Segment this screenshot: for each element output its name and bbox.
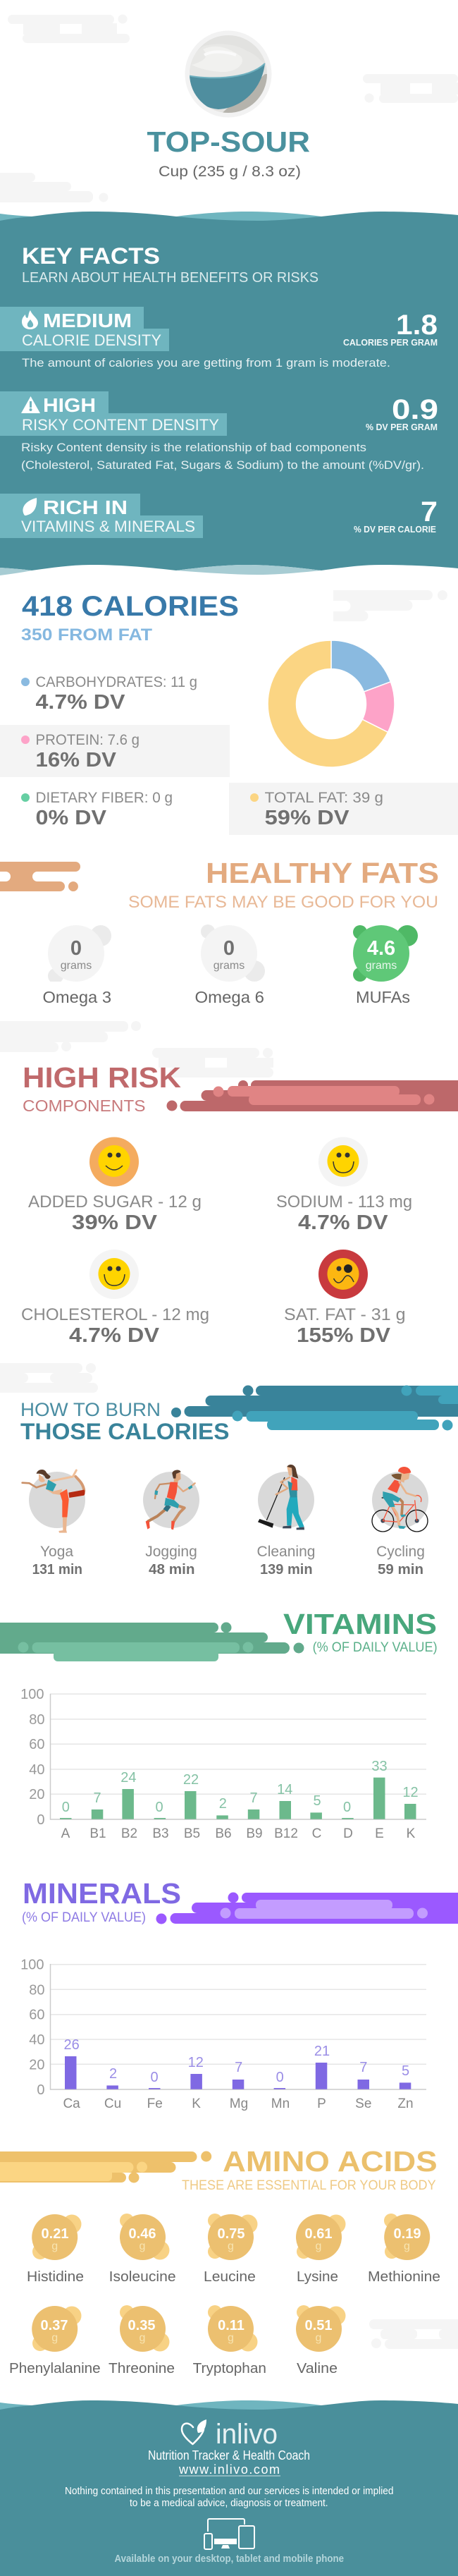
icon: warning triangle	[21, 396, 40, 413]
bar chart: vitamins: 14	[277, 1782, 292, 1797]
mufas: grams	[366, 960, 397, 972]
bar chart: vitamins: E	[375, 1826, 384, 1841]
bar chart: minerals: K	[192, 2096, 201, 2111]
bar chart: minerals: 7	[359, 2060, 367, 2075]
website link: www.inlivo.com	[178, 2462, 280, 2477]
amino: threonine: 0.35	[128, 2318, 155, 2333]
subheading: COMPONENTS	[23, 1097, 146, 1115]
heading: KEY FACTS	[22, 243, 160, 269]
component: saturated fat	[284, 1250, 406, 1347]
fact: risky content density	[0, 391, 438, 472]
panel: how to burn	[20, 1385, 458, 1577]
bar chart: vitamins: 2	[219, 1796, 227, 1812]
macro: dietary fiber	[21, 790, 173, 829]
panel: key facts	[0, 212, 458, 575]
activity: cycling: 59 min	[378, 1562, 423, 1577]
bar chart: vitamins: B2	[121, 1826, 137, 1841]
heading: HIGH RISK	[23, 1061, 181, 1094]
subheading: SOME FATS MAY BE GOOD FOR YOU	[128, 893, 438, 912]
bottom wave light	[0, 565, 321, 575]
bar chart: minerals: 7	[235, 2060, 242, 2075]
background cloud	[333, 590, 447, 621]
fact: risky content density: Risky Content density is the relationship of bad components	[21, 441, 366, 454]
amino: leucine	[204, 2214, 258, 2285]
fact: calorie density: The amount of calories you are getting from 1 gram is moderate.	[22, 356, 390, 370]
macro: dietary fiber: 0% DV	[35, 807, 107, 829]
fact: rich in vitamins and minerals: VITAMINS & MINERALS	[21, 518, 195, 535]
bar chart: minerals: P	[317, 2096, 326, 2111]
component: cholesterol: 4.7% DV	[69, 1324, 160, 1347]
macro: carbohydrates: CARBOHYDRATES: 11 g	[35, 674, 197, 690]
background cloud	[369, 2319, 458, 2349]
amino: phenylalanine	[9, 2306, 101, 2376]
bar chart: vitamins: K	[407, 1826, 416, 1841]
panel: minerals	[20, 1877, 458, 2111]
macro: dietary fiber: DIETARY FIBER: 0 g	[35, 790, 173, 806]
mufas: 4.6	[367, 937, 395, 960]
icon: flame	[22, 310, 38, 329]
subheading: 350 FROM FAT	[21, 625, 152, 645]
component: saturated fat: 155% DV	[297, 1324, 391, 1347]
omega 6: 0	[223, 937, 235, 960]
macro: carbohydrates	[21, 674, 197, 714]
panel: vitamins	[0, 1608, 438, 1841]
macro: protein: PROTEIN: 7.6 g	[35, 732, 140, 748]
top wave light	[0, 212, 321, 226]
mufas: MUFAs	[356, 988, 410, 1006]
bar chart: minerals: 12	[188, 2055, 204, 2070]
fact: risky content density: RISKY CONTENT DENSITY	[22, 416, 219, 434]
amino: histidine: 0.21	[42, 2226, 68, 2242]
activity: yoga: Yoga	[40, 1544, 73, 1560]
amino: threonine: Threonine	[109, 2361, 175, 2376]
macro: protein	[21, 732, 140, 771]
macro: total fat: TOTAL FAT: 39 g	[265, 790, 383, 806]
activity: yoga: 131 min	[32, 1562, 82, 1577]
component: saturated fat: SAT. FAT - 31 g	[284, 1305, 406, 1324]
amino: methionine: Methionine	[368, 2269, 440, 2285]
panel: healthy fats	[0, 857, 439, 1006]
component: sodium: 4.7% DV	[298, 1211, 388, 1234]
amino: valine: Valine	[297, 2361, 338, 2376]
amino: lysine: g	[316, 2240, 321, 2252]
bar chart: minerals: 60	[29, 2008, 45, 2023]
background clouds: header	[0, 14, 458, 202]
bar chart: vitamins: B12	[274, 1826, 298, 1841]
bar chart: vitamins: C	[312, 1826, 321, 1841]
panel: calories	[0, 590, 458, 835]
mufas	[353, 925, 418, 1006]
amino: histidine: g	[51, 2240, 58, 2252]
amino: lysine: 0.61	[305, 2226, 332, 2242]
bar chart: vitamins: 24	[120, 1770, 137, 1786]
subheading: LEARN ABOUT HEALTH BENEFITS OR RISKS	[22, 270, 318, 286]
header decoration	[156, 1893, 458, 1924]
bar chart: minerals	[20, 1958, 426, 2111]
activity: jogging	[143, 1470, 199, 1577]
amino: leucine: Leucine	[204, 2269, 256, 2285]
bar chart: minerals: Ca	[63, 2096, 80, 2111]
amino: methionine	[368, 2214, 440, 2285]
amino: tryptophan: 0.11	[218, 2318, 245, 2333]
component: sodium: SODIUM - 113 mg	[276, 1192, 412, 1211]
component: cholesterol	[21, 1250, 209, 1347]
disclaimer	[65, 2485, 393, 2509]
amino: lysine: Lysine	[297, 2269, 338, 2285]
bar chart: vitamins: 12	[402, 1785, 419, 1800]
bar chart: vitamins: 0	[62, 1800, 70, 1815]
footer background	[0, 2400, 458, 2576]
bar chart: minerals: Cu	[104, 2096, 121, 2111]
component: added sugar	[28, 1137, 202, 1234]
header decoration	[0, 2151, 211, 2183]
amino: isoleucine: Isoleucine	[109, 2269, 176, 2285]
fact: risky content density: 0.9	[392, 394, 438, 425]
activity: cleaning: Cleaning	[257, 1544, 315, 1560]
logo: inlivo	[182, 2419, 278, 2450]
bar chart: minerals: 0	[37, 2082, 45, 2098]
bar chart: vitamins: 40	[29, 1762, 45, 1778]
heading: VITAMINS	[283, 1608, 437, 1640]
bar chart: minerals: Fe	[147, 2096, 163, 2111]
amino: tryptophan: g	[228, 2332, 234, 2344]
activity: cycling	[372, 1467, 428, 1577]
fact: risky content density: % DV PER GRAM	[366, 422, 438, 432]
fact: rich in vitamins and minerals: % DV PER CALORIE	[354, 524, 436, 535]
amino: tryptophan: Tryptophan	[193, 2361, 266, 2376]
subheading: THESE ARE ESSENTIAL FOR YOUR BODY	[182, 2178, 436, 2193]
row backgrounds	[0, 725, 230, 777]
bar chart: vitamins: 0	[37, 1812, 45, 1828]
bar chart: vitamins	[20, 1687, 426, 1841]
bar chart: vitamins: 33	[371, 1759, 388, 1774]
amino: methionine: 0.19	[394, 2226, 421, 2242]
component: sodium	[276, 1137, 412, 1234]
bar chart: vitamins: B9	[246, 1826, 263, 1841]
bar chart: vitamins: A	[61, 1826, 70, 1841]
bar chart: vitamins: 0	[343, 1800, 351, 1815]
bar chart: vitamins: 22	[183, 1772, 199, 1788]
amino: leucine: 0.75	[218, 2226, 245, 2242]
amino: phenylalanine: 0.37	[41, 2318, 68, 2333]
subheading: (% OF DAILY VALUE)	[22, 1910, 146, 1925]
fact: calorie density: CALORIES PER GRAM	[343, 337, 438, 348]
bar chart: minerals: 26	[63, 2037, 80, 2053]
teal background	[0, 212, 458, 570]
bar chart: minerals: Mn	[271, 2096, 290, 2111]
amino: threonine	[109, 2305, 175, 2376]
fact: calorie density: 1.8	[396, 310, 438, 341]
amino: isoleucine: 0.46	[129, 2226, 156, 2242]
fact: calorie density	[0, 307, 438, 370]
heading line 2: THOSE CALORIES	[20, 1419, 230, 1444]
fact: rich in vitamins and minerals	[0, 494, 438, 538]
amino: threonine: g	[140, 2332, 145, 2344]
bar chart: vitamins: 80	[29, 1712, 45, 1728]
logo: inlivo: inlivo	[216, 2419, 278, 2450]
bar chart: vitamins: B3	[152, 1826, 169, 1841]
macro: carbohydrates: 4.7% DV	[35, 691, 125, 714]
heading line 1: HOW TO BURN	[20, 1399, 161, 1420]
bar chart: vitamins: 20	[29, 1787, 45, 1802]
food photo: bowl of sour cream	[185, 31, 272, 117]
fact: calorie density: MEDIUM	[43, 310, 132, 331]
header decoration	[166, 1080, 458, 1111]
bar chart: vitamins: D	[343, 1826, 353, 1841]
disclaimer: to be a medical advice, diagnosis or treatment.	[130, 2497, 328, 2509]
icon: leaf	[23, 498, 37, 515]
amino: isoleucine: g	[140, 2240, 145, 2252]
bar chart: minerals: 40	[29, 2032, 45, 2048]
bar chart: minerals: 100	[20, 1958, 44, 1973]
macro: protein: 16% DV	[35, 749, 117, 771]
panel: footer	[0, 2400, 458, 2576]
bar chart: vitamins: 60	[29, 1737, 45, 1752]
component: cholesterol: CHOLESTEROL - 12 mg	[21, 1305, 209, 1324]
panel: high risk	[21, 1061, 458, 1347]
bar chart: vitamins: B1	[89, 1826, 106, 1841]
disclaimer: Nothing contained in this presentation and our services is intended or implied	[65, 2485, 393, 2497]
bar chart: minerals: 20	[29, 2057, 45, 2073]
header decoration	[0, 862, 80, 891]
subheading: (% OF DAILY VALUE)	[313, 1640, 438, 1655]
amino: histidine	[27, 2214, 84, 2285]
bar chart: vitamins: 7	[93, 1790, 101, 1806]
tagline: Nutrition Tracker & Health Coach	[148, 2448, 310, 2462]
bar chart: vitamins: B5	[184, 1826, 200, 1841]
bar chart: vitamins: 5	[313, 1793, 321, 1809]
bar chart: minerals: 2	[109, 2066, 117, 2082]
heading: AMINO ACIDS	[223, 2145, 438, 2178]
activity: cleaning	[257, 1465, 315, 1577]
donut chart	[268, 640, 395, 767]
background clouds: high risk	[0, 1021, 273, 1078]
background cloud: burn	[0, 1363, 98, 1393]
component: added sugar: 39% DV	[72, 1211, 158, 1234]
amino: phenylalanine: Phenylalanine	[9, 2361, 101, 2376]
amino: methionine: g	[404, 2240, 410, 2252]
serving size: Cup (235 g / 8.3 oz)	[159, 164, 301, 180]
omega 3: Omega 3	[42, 988, 111, 1006]
amino: phenylalanine: g	[51, 2332, 58, 2344]
bar chart: minerals: 5	[402, 2063, 409, 2079]
macro: total fat	[250, 790, 383, 829]
component: added sugar: ADDED SUGAR - 12 g	[28, 1192, 202, 1211]
fact: calorie density: CALORIE DENSITY	[22, 331, 161, 349]
macro: total fat: 59% DV	[265, 807, 349, 829]
bar chart: minerals: Se	[355, 2096, 371, 2111]
amino: lysine	[296, 2214, 345, 2285]
amino: valine: g	[316, 2332, 321, 2344]
bar chart: minerals: 0	[150, 2070, 159, 2085]
heading: MINERALS	[23, 1877, 181, 1910]
omega 6: Omega 6	[194, 988, 264, 1006]
bar chart: vitamins: 7	[249, 1790, 258, 1806]
bar chart: vitamins: 0	[155, 1800, 163, 1815]
amino: valine	[296, 2305, 345, 2376]
activity: cycling: Cycling	[376, 1544, 425, 1560]
icon: devices	[204, 2519, 254, 2549]
omega 6	[194, 924, 265, 1006]
amino: valine: 0.51	[305, 2318, 332, 2333]
amino: histidine: Histidine	[27, 2269, 84, 2285]
bar chart: minerals: Mg	[230, 2096, 248, 2111]
amino: leucine: g	[228, 2240, 234, 2252]
fact: risky content density: HIGH	[43, 394, 96, 416]
bar chart: vitamins: B6	[215, 1826, 232, 1841]
omega 6: grams	[213, 960, 245, 972]
footer wave light	[0, 2400, 321, 2415]
title: TOP-SOUR	[147, 126, 310, 158]
heading: HEALTHY FATS	[206, 857, 439, 889]
activity: cleaning: 139 min	[260, 1562, 313, 1577]
omega 3	[42, 925, 111, 1006]
panel: amino acids	[0, 2145, 458, 2376]
bar chart: minerals: Zn	[397, 2096, 414, 2111]
bar chart: minerals: 21	[314, 2044, 330, 2059]
heading: 418 CALORIES	[22, 591, 239, 622]
omega 3: 0	[70, 937, 82, 960]
activity: yoga	[23, 1470, 85, 1577]
fact: risky content density: (Cholesterol, Saturated Fat, Sugars & Sodium) to the amount (%DV/gr).	[21, 458, 424, 472]
header decoration	[0, 1622, 304, 1661]
bar chart: vitamins: 100	[20, 1687, 44, 1702]
availability note: Available on your desktop, tablet and mobile phone	[114, 2553, 344, 2565]
fact: rich in vitamins and minerals: RICH IN	[43, 496, 128, 518]
bar chart: minerals: 0	[276, 2070, 284, 2085]
activity: jogging: 48 min	[149, 1562, 194, 1577]
omega 3: grams	[61, 960, 92, 972]
amino: isoleucine	[109, 2214, 176, 2285]
fact: rich in vitamins and minerals: 7	[421, 496, 438, 527]
bar chart: minerals: 80	[29, 1982, 45, 1998]
amino: tryptophan	[193, 2305, 266, 2376]
header decoration	[171, 1385, 458, 1430]
activity: jogging: Jogging	[145, 1544, 197, 1560]
